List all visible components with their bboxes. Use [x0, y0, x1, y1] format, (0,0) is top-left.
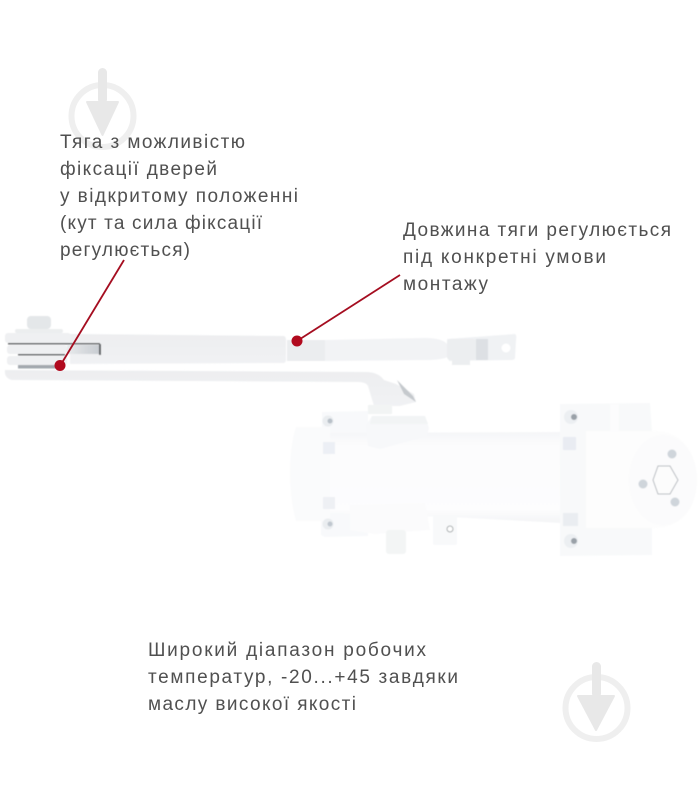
- text block: arm fixing: Тяга з можливістю: [60, 132, 245, 153]
- text block: temperature range: Широкий діапазон робочих: [148, 640, 426, 661]
- closer body: [290, 411, 562, 554]
- text block: temperature range: маслу високої якості: [148, 694, 356, 715]
- text block: arm fixing: регулюється): [60, 240, 190, 261]
- right mounting plate: [560, 403, 652, 556]
- text block: temperature range: [148, 640, 458, 715]
- text block: arm length: монтажу: [403, 274, 488, 295]
- lower arm: [5, 370, 416, 414]
- callout leader: arm fixing: [54, 260, 124, 371]
- text block: temperature range: температур, -20...+45 завдяки: [148, 667, 458, 688]
- callout leader: arm length: [292, 275, 400, 346]
- right end cap: [586, 431, 697, 528]
- pivot discs and bolt: [5, 316, 101, 368]
- text block: arm length: Довжина тяги регулюється: [403, 220, 671, 241]
- text block: arm fixing: (кут та сила фіксації: [60, 213, 263, 234]
- text block: arm length: під конкретні умови: [403, 247, 606, 268]
- wall bracket with roller: [447, 334, 516, 365]
- adjustable upper arm: [70, 334, 447, 364]
- text block: arm fixing: у відкритому положенні: [60, 186, 298, 207]
- text block: arm length: [403, 220, 671, 295]
- door closer product illustration: [5, 316, 697, 556]
- watermark icon: bottom right: [566, 662, 628, 739]
- text block: arm fixing: [60, 132, 298, 261]
- text block: arm fixing: фіксації дверей: [60, 159, 217, 180]
- watermark icon: top left: [72, 68, 134, 147]
